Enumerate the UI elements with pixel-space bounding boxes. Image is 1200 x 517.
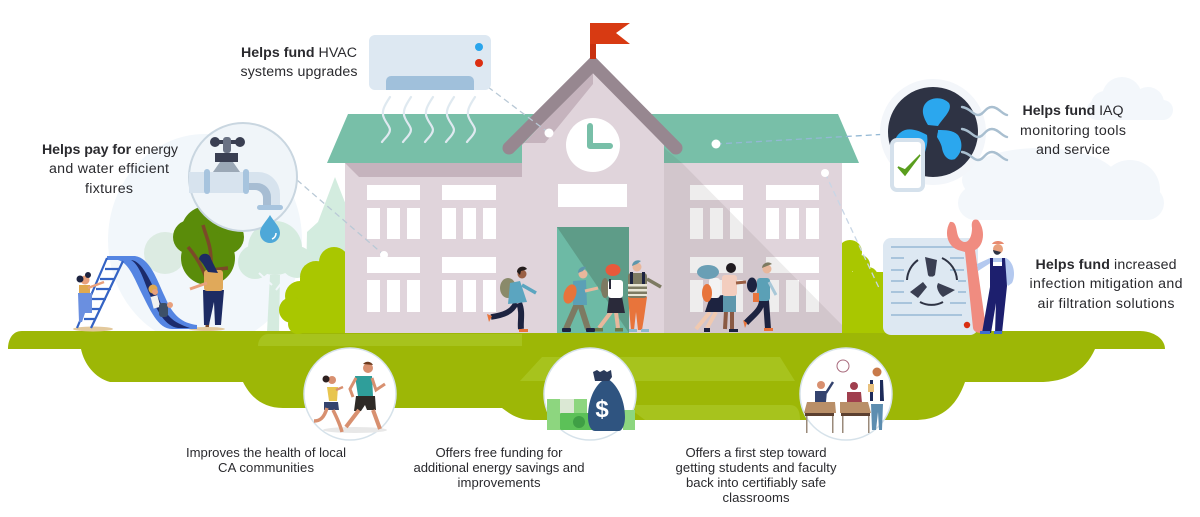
label: fixtures (42, 142, 179, 197)
label: funding: improvements (458, 475, 541, 490)
student in pink top (722, 263, 746, 332)
fan (910, 257, 955, 298)
windows right (690, 185, 819, 312)
label: IAQ (1020, 103, 1126, 158)
label: HVAC: systems upgrades (240, 64, 358, 80)
label: IAQ: monitoring tools (1020, 123, 1126, 139)
student running left (487, 267, 536, 332)
circle: classroom (800, 348, 892, 440)
label: fixtures: Helps pay for energy (42, 142, 179, 158)
wrench (947, 219, 986, 333)
label: funding: Offers free funding for (436, 445, 563, 460)
label: health: CA communities (218, 460, 314, 475)
circle: runners (304, 348, 396, 440)
ground (8, 331, 1165, 420)
clouds background (958, 77, 1173, 220)
ground highlights (258, 334, 800, 420)
leader lines (297, 87, 889, 290)
woman runner (314, 376, 343, 432)
centre window (558, 184, 627, 207)
student in striped top (628, 260, 661, 332)
door (557, 227, 629, 333)
woman (190, 254, 224, 325)
label: filtration: infection mitigation and (1030, 276, 1182, 292)
label: filtration (1030, 257, 1182, 312)
label: health (186, 445, 346, 475)
girl on ladder (76, 272, 104, 322)
label: HVAC (240, 45, 358, 80)
label: fixtures: fixtures (85, 181, 133, 197)
circle: money bag (544, 348, 636, 440)
dollar sign: $ (595, 396, 609, 423)
walls (345, 163, 842, 333)
child on slide (148, 284, 173, 317)
label: classrooms (676, 445, 837, 505)
green roof (327, 114, 859, 163)
slide (107, 256, 197, 329)
pupils (815, 381, 862, 403)
windows left (367, 185, 496, 312)
students walking (487, 260, 776, 332)
flag (590, 23, 630, 59)
label: funding: additional energy savings and (414, 460, 584, 475)
fan blades (894, 98, 961, 160)
label: filtration: Helps fund increased (1036, 257, 1176, 273)
label: classrooms: back into certifiably safe (686, 475, 826, 490)
label: IAQ: and service (1036, 142, 1110, 158)
school building (327, 23, 859, 333)
ladder (77, 258, 123, 328)
bag (588, 372, 625, 431)
teacher (868, 368, 884, 430)
central gable (522, 70, 664, 333)
cash stacks (547, 399, 635, 430)
label: classrooms: Offers a first step toward (686, 445, 826, 460)
label: classrooms: classrooms (722, 490, 790, 505)
student with orange backpack (561, 267, 598, 332)
icon: faucet (189, 123, 297, 243)
slide with children (73, 254, 225, 332)
label: HVAC: Helps fund HVAC (241, 45, 357, 61)
label: filtration: air filtration solutions (1038, 296, 1174, 312)
desks (804, 402, 871, 433)
student with red hair (595, 264, 625, 332)
bushes (279, 240, 886, 334)
icon: air conditioner (369, 35, 491, 142)
monitor device (892, 140, 923, 190)
clock (566, 118, 620, 172)
heat waves (382, 97, 475, 142)
tree (173, 206, 244, 330)
icon: fan with air monitor (880, 79, 1007, 190)
label: IAQ: Helps fund IAQ (1022, 103, 1124, 119)
student walking right (743, 262, 776, 331)
label: health: Improves the health of local (186, 445, 346, 460)
roof underside shadow (345, 163, 522, 177)
right wing shadow (664, 148, 842, 333)
student with blue hair (696, 265, 724, 332)
background blob and pale trees (108, 134, 346, 346)
gable roof (509, 64, 676, 148)
icon: air filtration unit and worker (883, 219, 1014, 335)
label: fixtures: and water efficient (49, 161, 169, 177)
worker (977, 241, 1014, 334)
leader dots (380, 128, 829, 259)
man runner (346, 362, 385, 429)
label: classrooms: getting students and faculty (676, 460, 837, 475)
air waves (962, 107, 1007, 160)
label: funding (414, 445, 584, 490)
